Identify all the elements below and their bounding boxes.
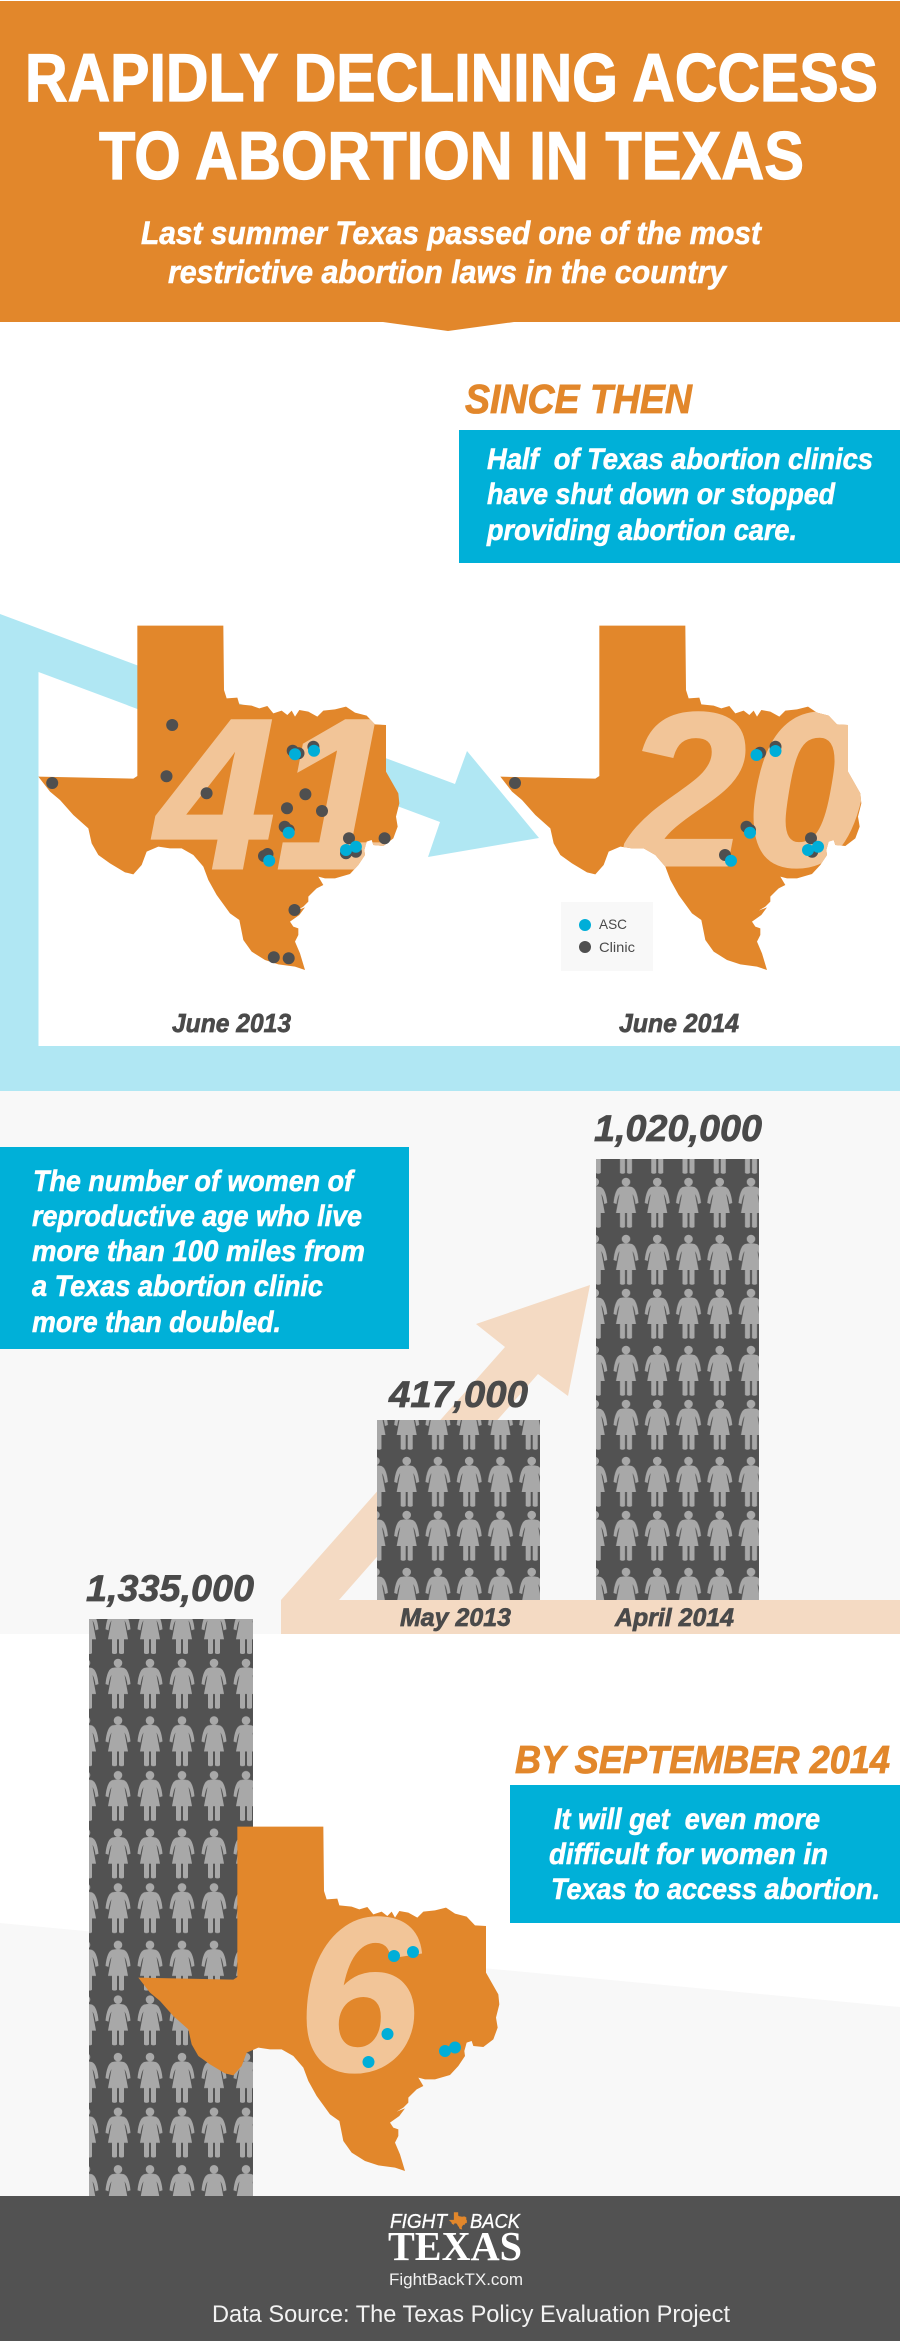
title: TO ABORTION IN TEXAS: [99, 118, 804, 194]
label May 2013: May 2013: [400, 1604, 511, 1632]
ASC dots 2013: [263, 745, 362, 867]
legend: [561, 902, 653, 971]
clinic dots 2013: [46, 719, 391, 964]
callout: half of clinics: have shut down or stopped: [487, 478, 836, 511]
callout: women more than 100 miles: more than 100 miles from: [32, 1235, 365, 1268]
ASC dots 2014 projected: [362, 1946, 461, 2068]
callout: women more than 100 miles: more than doubled.: [32, 1306, 281, 1339]
label: June 2014: June 2014: [619, 1008, 740, 1038]
bar: May 2013: [377, 1374, 540, 1632]
title: [25, 40, 878, 194]
website: FightBackTX.com: [389, 2270, 523, 2289]
subtitle: restrictive abortion laws in the country: [168, 254, 728, 290]
callout: half of clinics: [459, 430, 900, 563]
logo: Fight Back Texas: BACK: [470, 2211, 522, 2233]
header banner: [0, 1, 900, 331]
value 1,020,000: 1,020,000: [594, 1108, 762, 1149]
callout: women more than 100 miles: a Texas abortion clinic: [32, 1270, 323, 1303]
bar: April 2014: [594, 1108, 762, 1632]
subtitle: Last summer Texas passed one of the most: [141, 215, 762, 251]
number 20: 20: [621, 669, 867, 912]
map: June 2013: [38, 626, 399, 970]
subtitle: [141, 215, 762, 290]
arrow: peach trend: [281, 1285, 900, 1634]
callout: more difficult: difficult for women in: [549, 1838, 828, 1871]
label: June 2013: June 2013: [172, 1008, 292, 1038]
value 417,000: 417,000: [388, 1374, 528, 1415]
number 41: 41: [152, 675, 395, 914]
value 1,335,000: 1,335,000: [86, 1568, 254, 1609]
callout: more difficult: It will get even more: [554, 1803, 820, 1836]
label April 2014: April 2014: [614, 1604, 734, 1632]
clinic dots 2014: [509, 741, 818, 861]
callout: half of clinics: Half of Texas abortion clinics: [487, 443, 873, 476]
legend: ASC: [599, 916, 627, 932]
map: September 2014: [138, 1827, 499, 2171]
legend: Clinic: [599, 939, 635, 955]
callout: more difficult: [510, 1785, 900, 1923]
logo: Fight Back Texas: TEXAS: [388, 2223, 522, 2269]
callout: women more than 100 miles: [0, 1147, 409, 1349]
callout: half of clinics: providing abortion care.: [486, 514, 797, 547]
heading: since then: SINCE THEN: [465, 376, 693, 422]
icon: Texas: [449, 2212, 467, 2229]
map: June 2014: [500, 626, 867, 970]
callout: women more than 100 miles: The number of women of: [33, 1165, 356, 1198]
data source: Data Source: The Texas Policy Evaluation Project: [212, 2301, 730, 2328]
arrow: light blue trend: [0, 614, 900, 1091]
number 6: 6: [298, 1874, 421, 2117]
footer: [0, 2196, 900, 2341]
logo: Fight Back Texas: FIGHT: [390, 2211, 449, 2233]
bar: September 2014: [86, 1568, 254, 2197]
ASC dots 2014: [725, 745, 824, 867]
callout: women more than 100 miles: reproductive age who live: [32, 1200, 362, 1233]
